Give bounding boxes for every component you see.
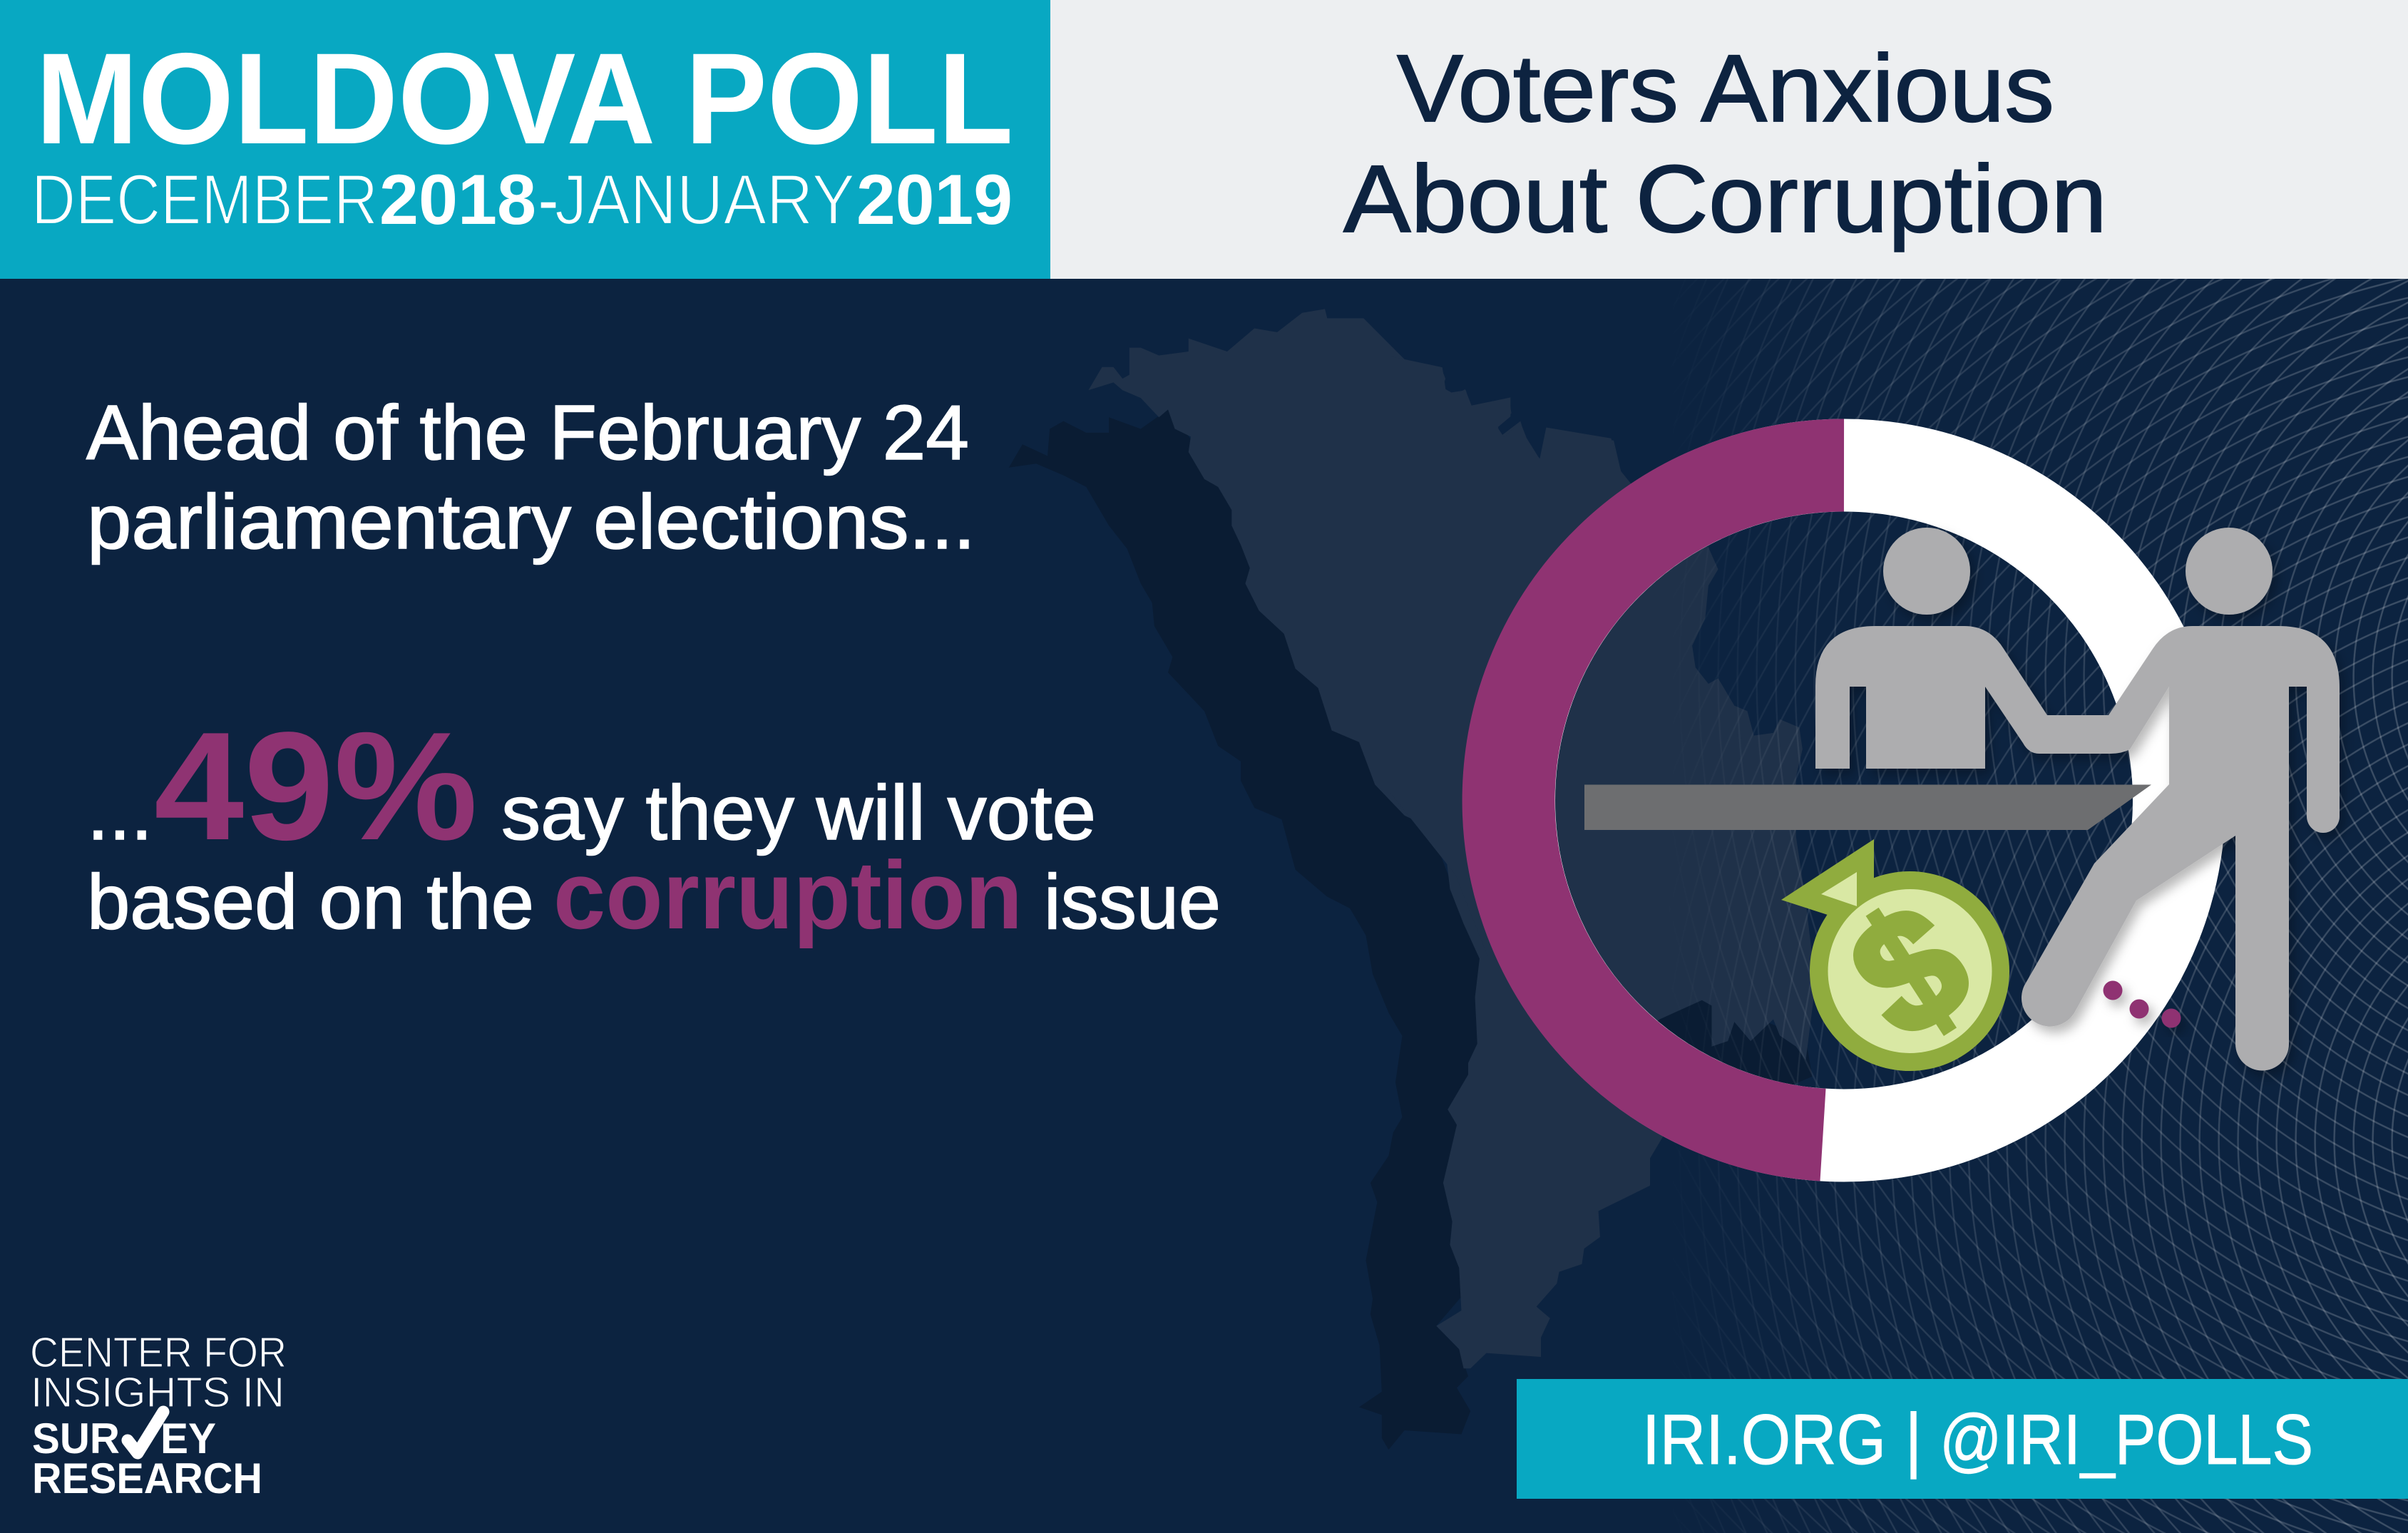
donut chart 49 percent (1509, 465, 2179, 1135)
date range: 2019 (856, 160, 1013, 239)
date range: DECEMBER (31, 160, 378, 239)
map main layer east (1390, 357, 1815, 1212)
logo: Center for Insights in Survey Research (30, 1329, 287, 1502)
logo line: center for: CENTER FOR (30, 1329, 287, 1376)
date range: JANUARY (555, 160, 855, 239)
header: right panel (1050, 0, 2408, 279)
footer contact bar (1517, 1379, 2408, 1499)
date range: 2018 (379, 160, 536, 239)
headline: About Corruption (1343, 146, 2107, 252)
say they will vote: say they will vote (501, 769, 1096, 856)
title: MOLDOVA POLL (36, 26, 1013, 171)
map shadow in ring (1585, 995, 1813, 1090)
separator: | (1904, 1398, 1923, 1480)
logo line: ey: EY (160, 1415, 216, 1462)
logo line: research: RESEARCH (32, 1455, 262, 1502)
logo line: sur: SUR (32, 1415, 120, 1462)
49 percent: 49% (154, 699, 478, 872)
ellipsis: ... (87, 769, 153, 856)
teal bar (1517, 1379, 2408, 1499)
based on the: based on the (87, 858, 534, 945)
49 percent segment (1509, 465, 1844, 1135)
intro text: parliamentary elections... (87, 478, 975, 565)
date range (31, 160, 1013, 239)
icon: purple dots (2104, 981, 2181, 1028)
icon: check mark (128, 1412, 163, 1453)
icon: bribe scene (1584, 528, 2340, 1075)
gray panel (1050, 0, 2408, 279)
headline: Voters Anxious (1397, 36, 2054, 142)
intro text (86, 389, 975, 565)
remainder segment (1509, 465, 2179, 1135)
date range: - (538, 160, 558, 239)
social handle: @IRI_POLLS (1940, 1400, 2313, 1479)
icon: money bag (1781, 839, 2009, 1075)
teal panel (0, 0, 1050, 279)
issue: issue (1044, 858, 1221, 945)
corruption: corruption (553, 841, 1023, 949)
headline (1343, 36, 2107, 252)
map main layer west (1088, 309, 1640, 1368)
website: IRI.ORG (1642, 1400, 1886, 1479)
logo line: insights in: INSIGHTS IN (31, 1369, 285, 1416)
counter (1584, 784, 2151, 830)
header: left panel (0, 0, 1050, 279)
map of Moldova (1009, 309, 1815, 1450)
intro text: Ahead of the February 24 (86, 389, 969, 476)
icon: two figures shaking hands (1815, 528, 2340, 1071)
icon: money bag: $ (1820, 866, 2000, 1075)
key finding text (87, 699, 1221, 949)
map shadow layer (1009, 409, 1480, 1450)
